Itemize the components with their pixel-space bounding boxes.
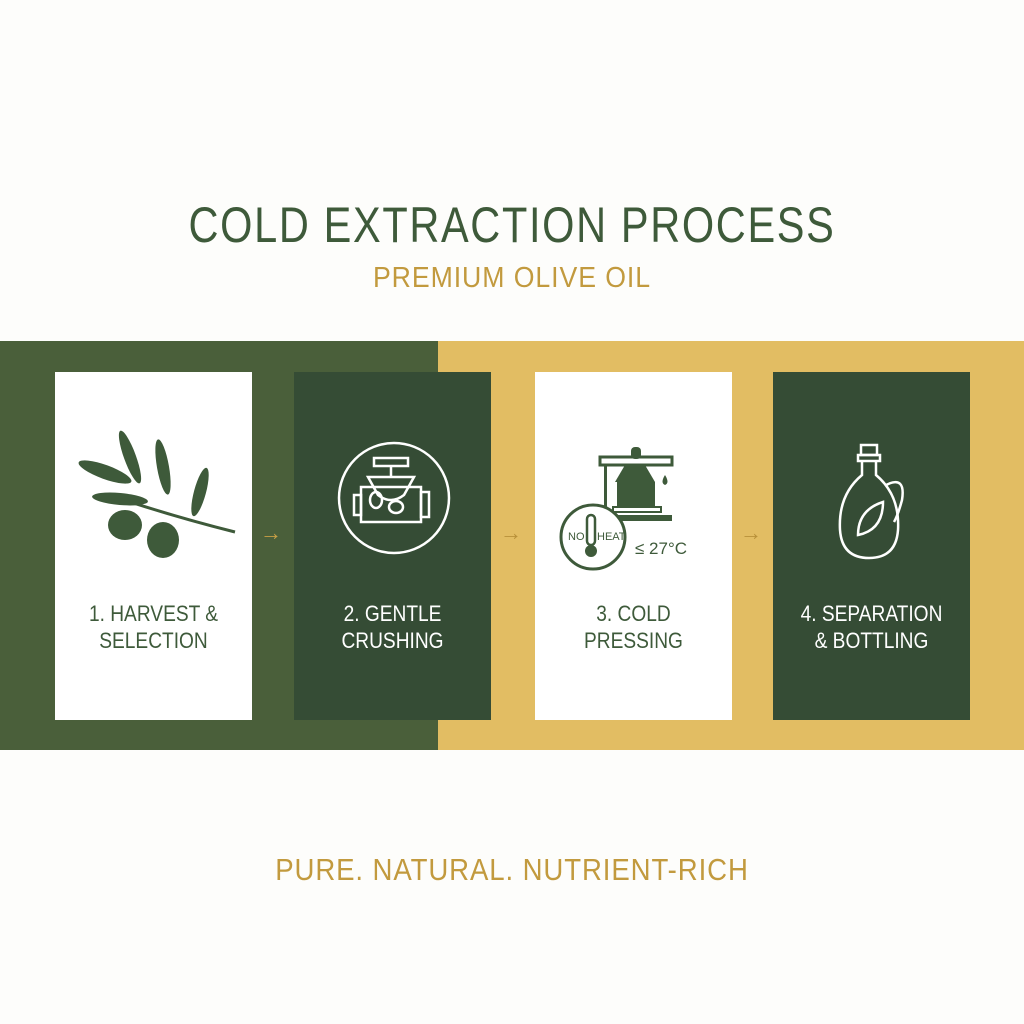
band: green xyxy=(0,341,438,750)
arrow 2: → xyxy=(500,520,522,545)
icon: olive branch xyxy=(78,430,236,558)
arrow 3: → xyxy=(740,520,762,545)
arrow 1: → xyxy=(260,520,282,545)
card 2: crushing: CRUSHING xyxy=(341,628,444,653)
title: COLD EXTRACTION PROCESS xyxy=(189,197,835,253)
card 1: harvest: SELECTION xyxy=(99,628,208,653)
icon: bottle xyxy=(838,444,904,560)
icon: press with no heat xyxy=(560,447,687,570)
card 2: crushing xyxy=(294,372,491,720)
card 2: crushing: 2. GENTLE xyxy=(344,601,441,626)
card 3: cold pressing xyxy=(535,372,732,720)
card 4: separation: & BOTTLING xyxy=(815,628,928,653)
card 3: cold pressing: 3. COLD xyxy=(596,601,671,626)
card 4: separation: 4. SEPARATION xyxy=(801,601,942,626)
footer tagline: PURE. NATURAL. NUTRIENT-RICH xyxy=(275,852,749,887)
card 1: harvest xyxy=(55,372,252,720)
subtitle: PREMIUM OLIVE OIL xyxy=(373,262,651,294)
band: gold xyxy=(438,341,1024,750)
icon: crusher xyxy=(338,442,450,554)
card 4: separation xyxy=(773,372,970,720)
card 3: cold pressing: PRESSING xyxy=(584,628,683,653)
icon: press with no heat: ≤ 27°C xyxy=(635,539,687,558)
icon: press with no heat: NO xyxy=(568,531,585,543)
icon: press with no heat: HEAT xyxy=(597,531,626,543)
card 1: harvest: 1. HARVEST & xyxy=(89,601,218,626)
